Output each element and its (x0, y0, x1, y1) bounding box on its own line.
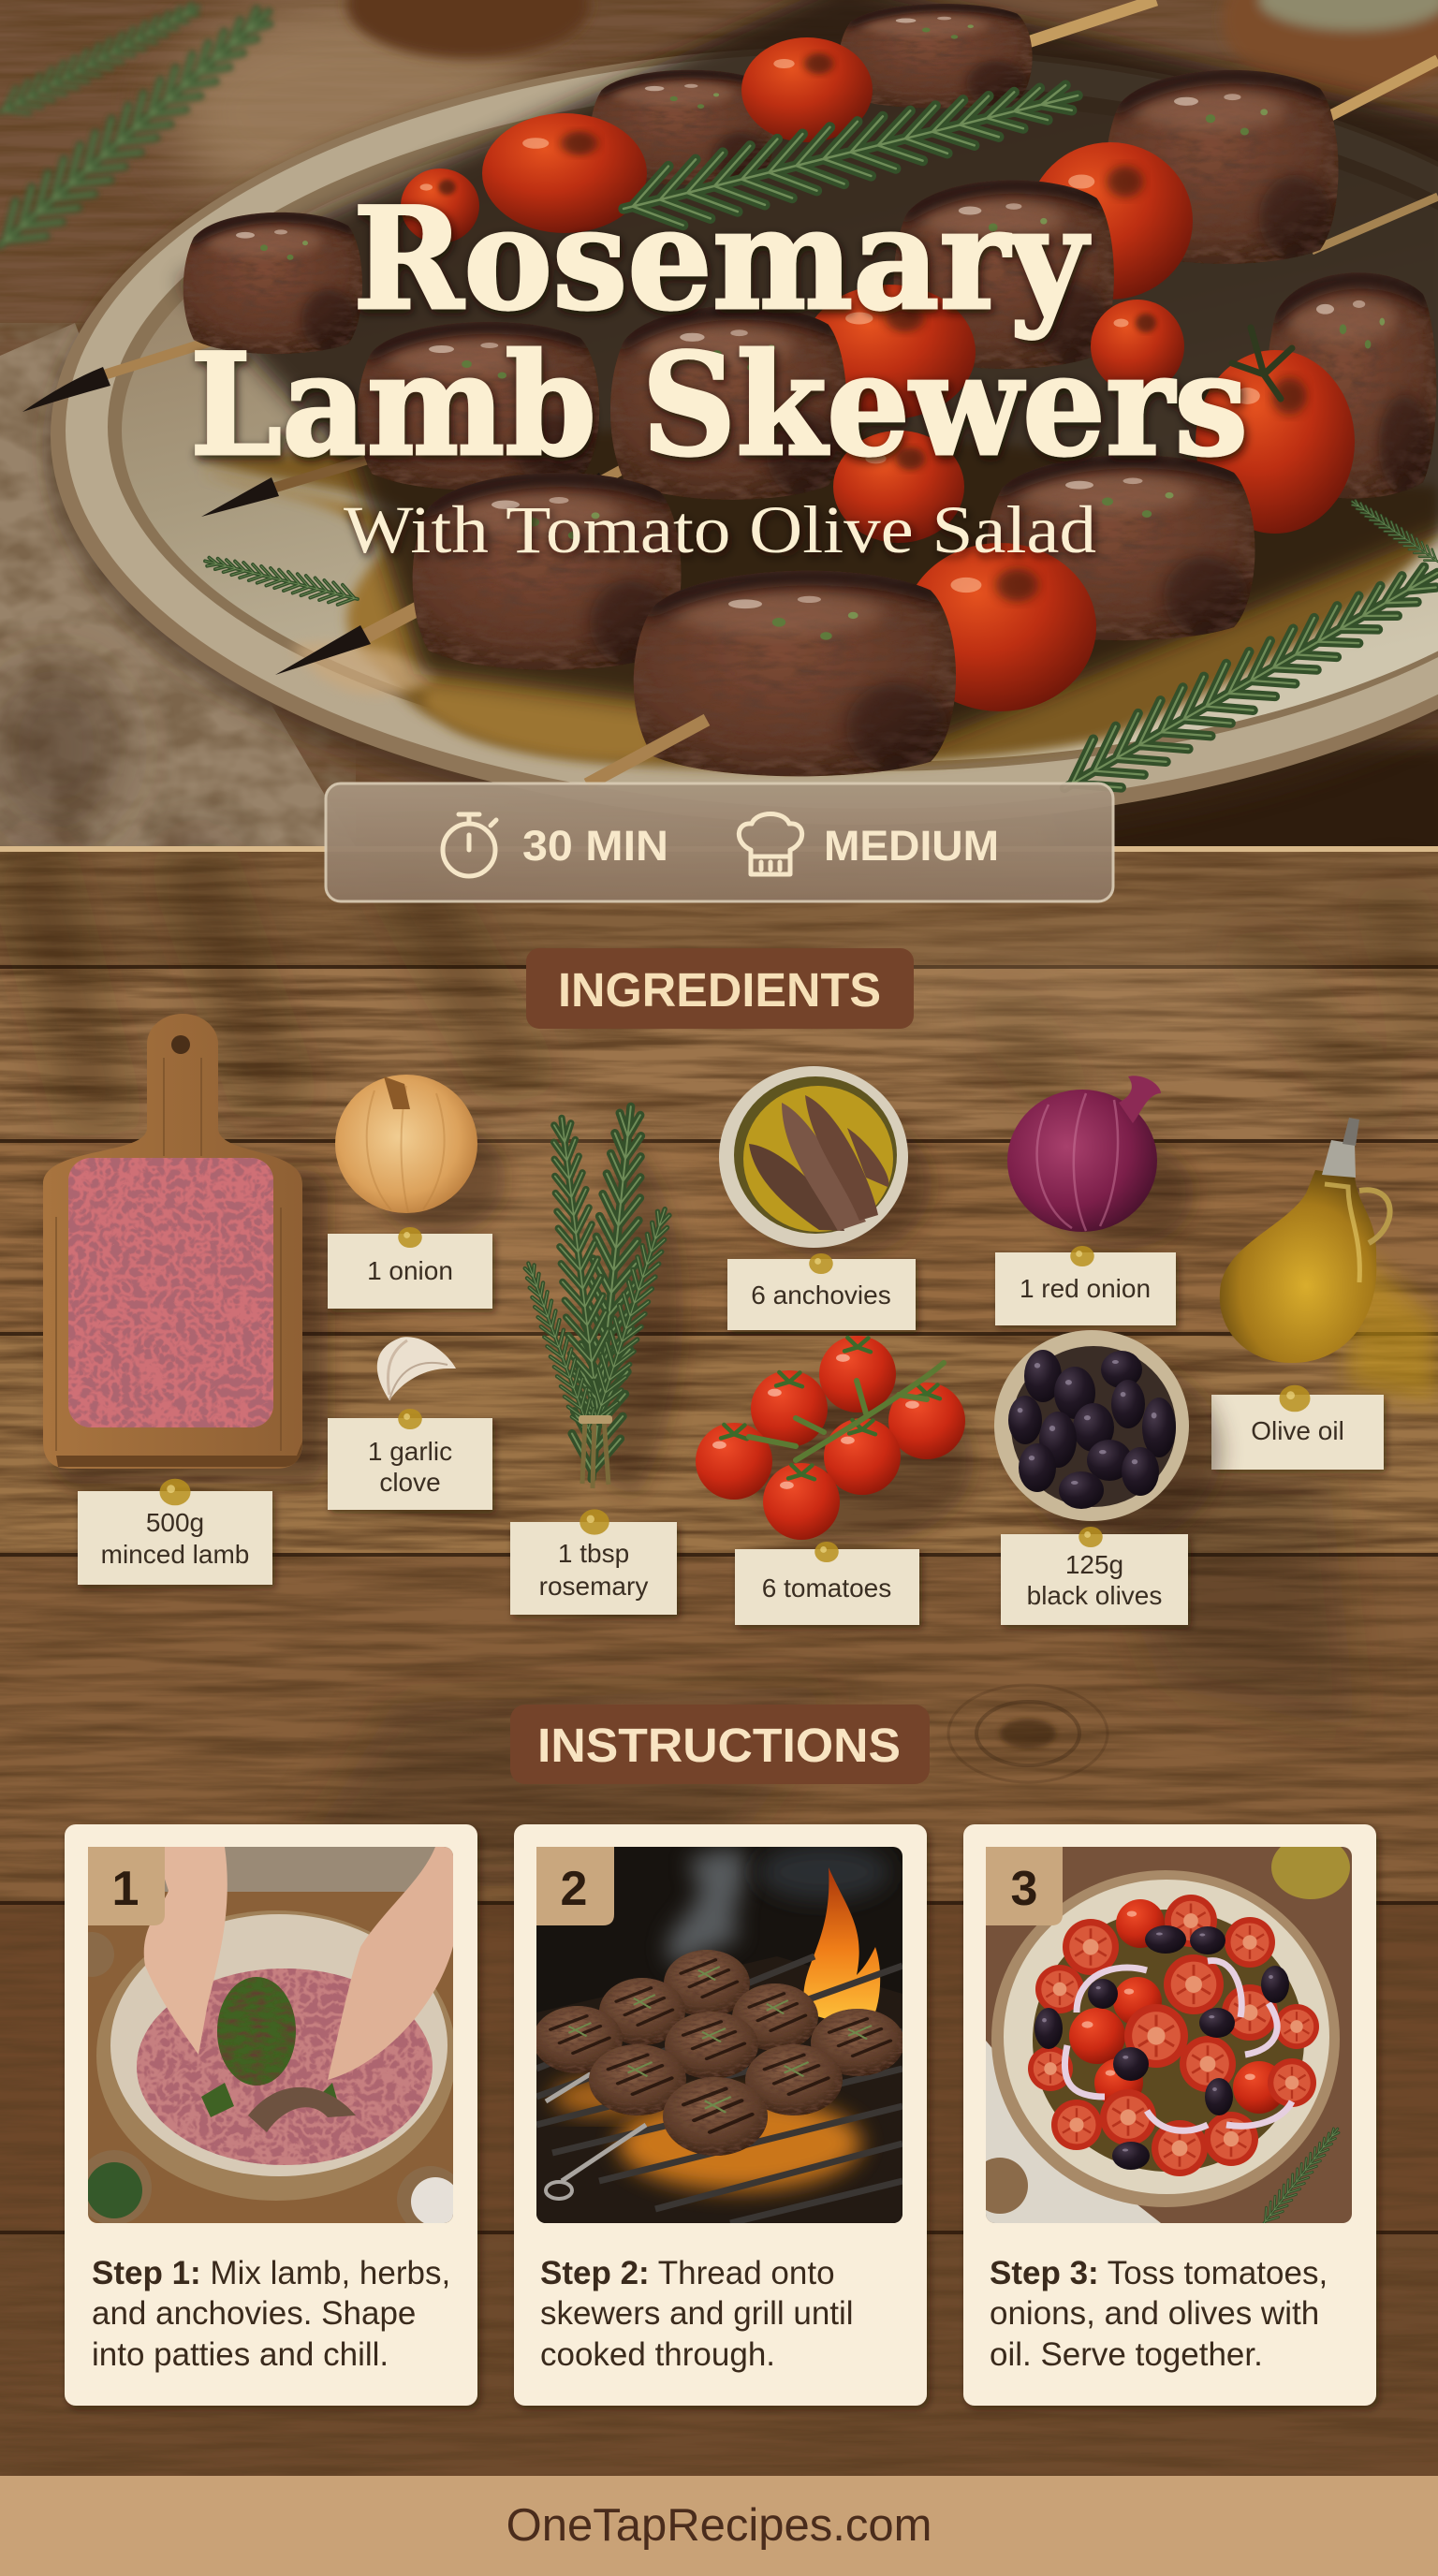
badge: number 3: 3 (1011, 1862, 1037, 1916)
subtitle: With Tomato Olive Salad (344, 492, 1096, 567)
label: 1 garlic clove: clove (379, 1468, 441, 1497)
ingredient: cherry tomatoes on the vine (696, 1336, 974, 1544)
label: 500g minced lamb: minced lamb (101, 1540, 249, 1569)
table background (0, 0, 1438, 871)
step 2 text: Step 2: Thread onto (540, 2255, 835, 2291)
step 2 text: cooked through. (540, 2336, 775, 2373)
step 1 text (92, 2255, 450, 2373)
time label: 30 MIN (522, 822, 668, 870)
step 3 text: onions, and olives with (990, 2295, 1319, 2332)
ingredient: garlic clove (377, 1337, 456, 1400)
ingredient: olive oil bottle (1220, 1118, 1438, 1404)
label: 500g minced lamb (78, 1479, 272, 1585)
label: 1 tbsp rosemary: 1 tbsp (558, 1539, 629, 1568)
step 1 text: into patties and chill. (92, 2336, 389, 2373)
plate (50, 0, 1438, 842)
step 3 text: oil. Serve together. (990, 2336, 1263, 2373)
blurred bowls behind the plate (346, 0, 1438, 98)
blurred rosemary top-left (0, 0, 284, 263)
label: 125g black olives (1001, 1527, 1188, 1625)
icon: chef hat (739, 814, 802, 874)
ingredient: black olives bowl (994, 1330, 1222, 1544)
badge: number 1 (88, 1847, 165, 1925)
step 1 image: mixing lamb in a bowl (88, 1847, 453, 2223)
step card 1 (65, 1824, 477, 2406)
ingredient: rosemary bunch (518, 1104, 683, 1498)
hero photo: grilled lamb skewers on a plate (0, 0, 1438, 871)
label: 6 tomatoes: 6 tomatoes (762, 1573, 891, 1603)
difficulty label: MEDIUM (824, 822, 999, 870)
heading: ingredients (526, 948, 914, 1029)
footer website: OneTapRecipes.com (506, 2500, 932, 2551)
label: 1 red onion (995, 1246, 1176, 1325)
label: 500g minced lamb: 500g (146, 1508, 204, 1537)
label: 1 garlic clove (328, 1409, 492, 1510)
step 2 text (540, 2255, 854, 2373)
minced lamb (68, 1158, 273, 1427)
step 1 text: and anchovies. Shape (92, 2295, 416, 2332)
info bar: time and difficulty (326, 783, 1113, 901)
label: 1 red onion: 1 red onion (1020, 1274, 1151, 1303)
ingredient: red onion (1007, 1076, 1194, 1250)
step 3 text: Step 3: Toss tomatoes, (990, 2255, 1328, 2291)
label: 1 tbsp rosemary (510, 1509, 677, 1615)
label: 125g black olives: 125g (1065, 1550, 1123, 1579)
title (190, 177, 1248, 488)
step 2 text: skewers and grill until (540, 2295, 854, 2332)
title: Lamb Skewers (190, 323, 1248, 488)
badge: number 3 (986, 1847, 1063, 1925)
badge: number 1: 1 (112, 1862, 139, 1916)
heading: instructions: INSTRUCTIONS (537, 1719, 901, 1772)
step 2 image: skewers on a flaming grill (533, 1844, 904, 2223)
footer band (0, 2476, 1438, 2576)
label: olive oil (1211, 1385, 1384, 1470)
title: Rosemary (353, 177, 1091, 342)
badge: number 2 (536, 1847, 614, 1925)
step card 2 (514, 1824, 927, 2406)
label: 125g black olives: black olives (1027, 1581, 1162, 1610)
ingredient: yellow onion (335, 1075, 506, 1236)
label: 1 onion: 1 onion (367, 1256, 453, 1285)
step 3 image: tomato olive salad bowl (972, 1836, 1352, 2228)
label: 1 tbsp rosemary: rosemary (539, 1572, 648, 1601)
heading: instructions (510, 1705, 930, 1784)
fresh rosemary sprigs on plate (202, 66, 1438, 812)
step 3 text (990, 2255, 1328, 2373)
badge: number 2: 2 (561, 1862, 587, 1916)
icon: stopwatch (443, 814, 496, 876)
label: 1 garlic clove: 1 garlic (368, 1437, 452, 1466)
step card 3 (963, 1824, 1376, 2406)
label: 6 anchovies (727, 1253, 916, 1330)
label: olive oil: Olive oil (1251, 1416, 1344, 1445)
ingredient: anchovies in oil (719, 1066, 932, 1259)
gold divider line (0, 846, 1438, 852)
label: 1 onion (328, 1227, 492, 1309)
label: 6 tomatoes (735, 1542, 919, 1625)
label: 6 anchovies: 6 anchovies (751, 1281, 891, 1310)
step 1 text: Step 1: Mix lamb, herbs, (92, 2255, 450, 2291)
lamb chunks and roasted tomatoes (183, 2, 1436, 784)
skewer sticks (22, 0, 1438, 675)
ingredient: cutting board with minced lamb (43, 1014, 328, 1484)
heading: ingredients: INGREDIENTS (558, 963, 881, 1017)
linen cloth (0, 323, 356, 847)
wooden table background (0, 847, 1438, 2481)
